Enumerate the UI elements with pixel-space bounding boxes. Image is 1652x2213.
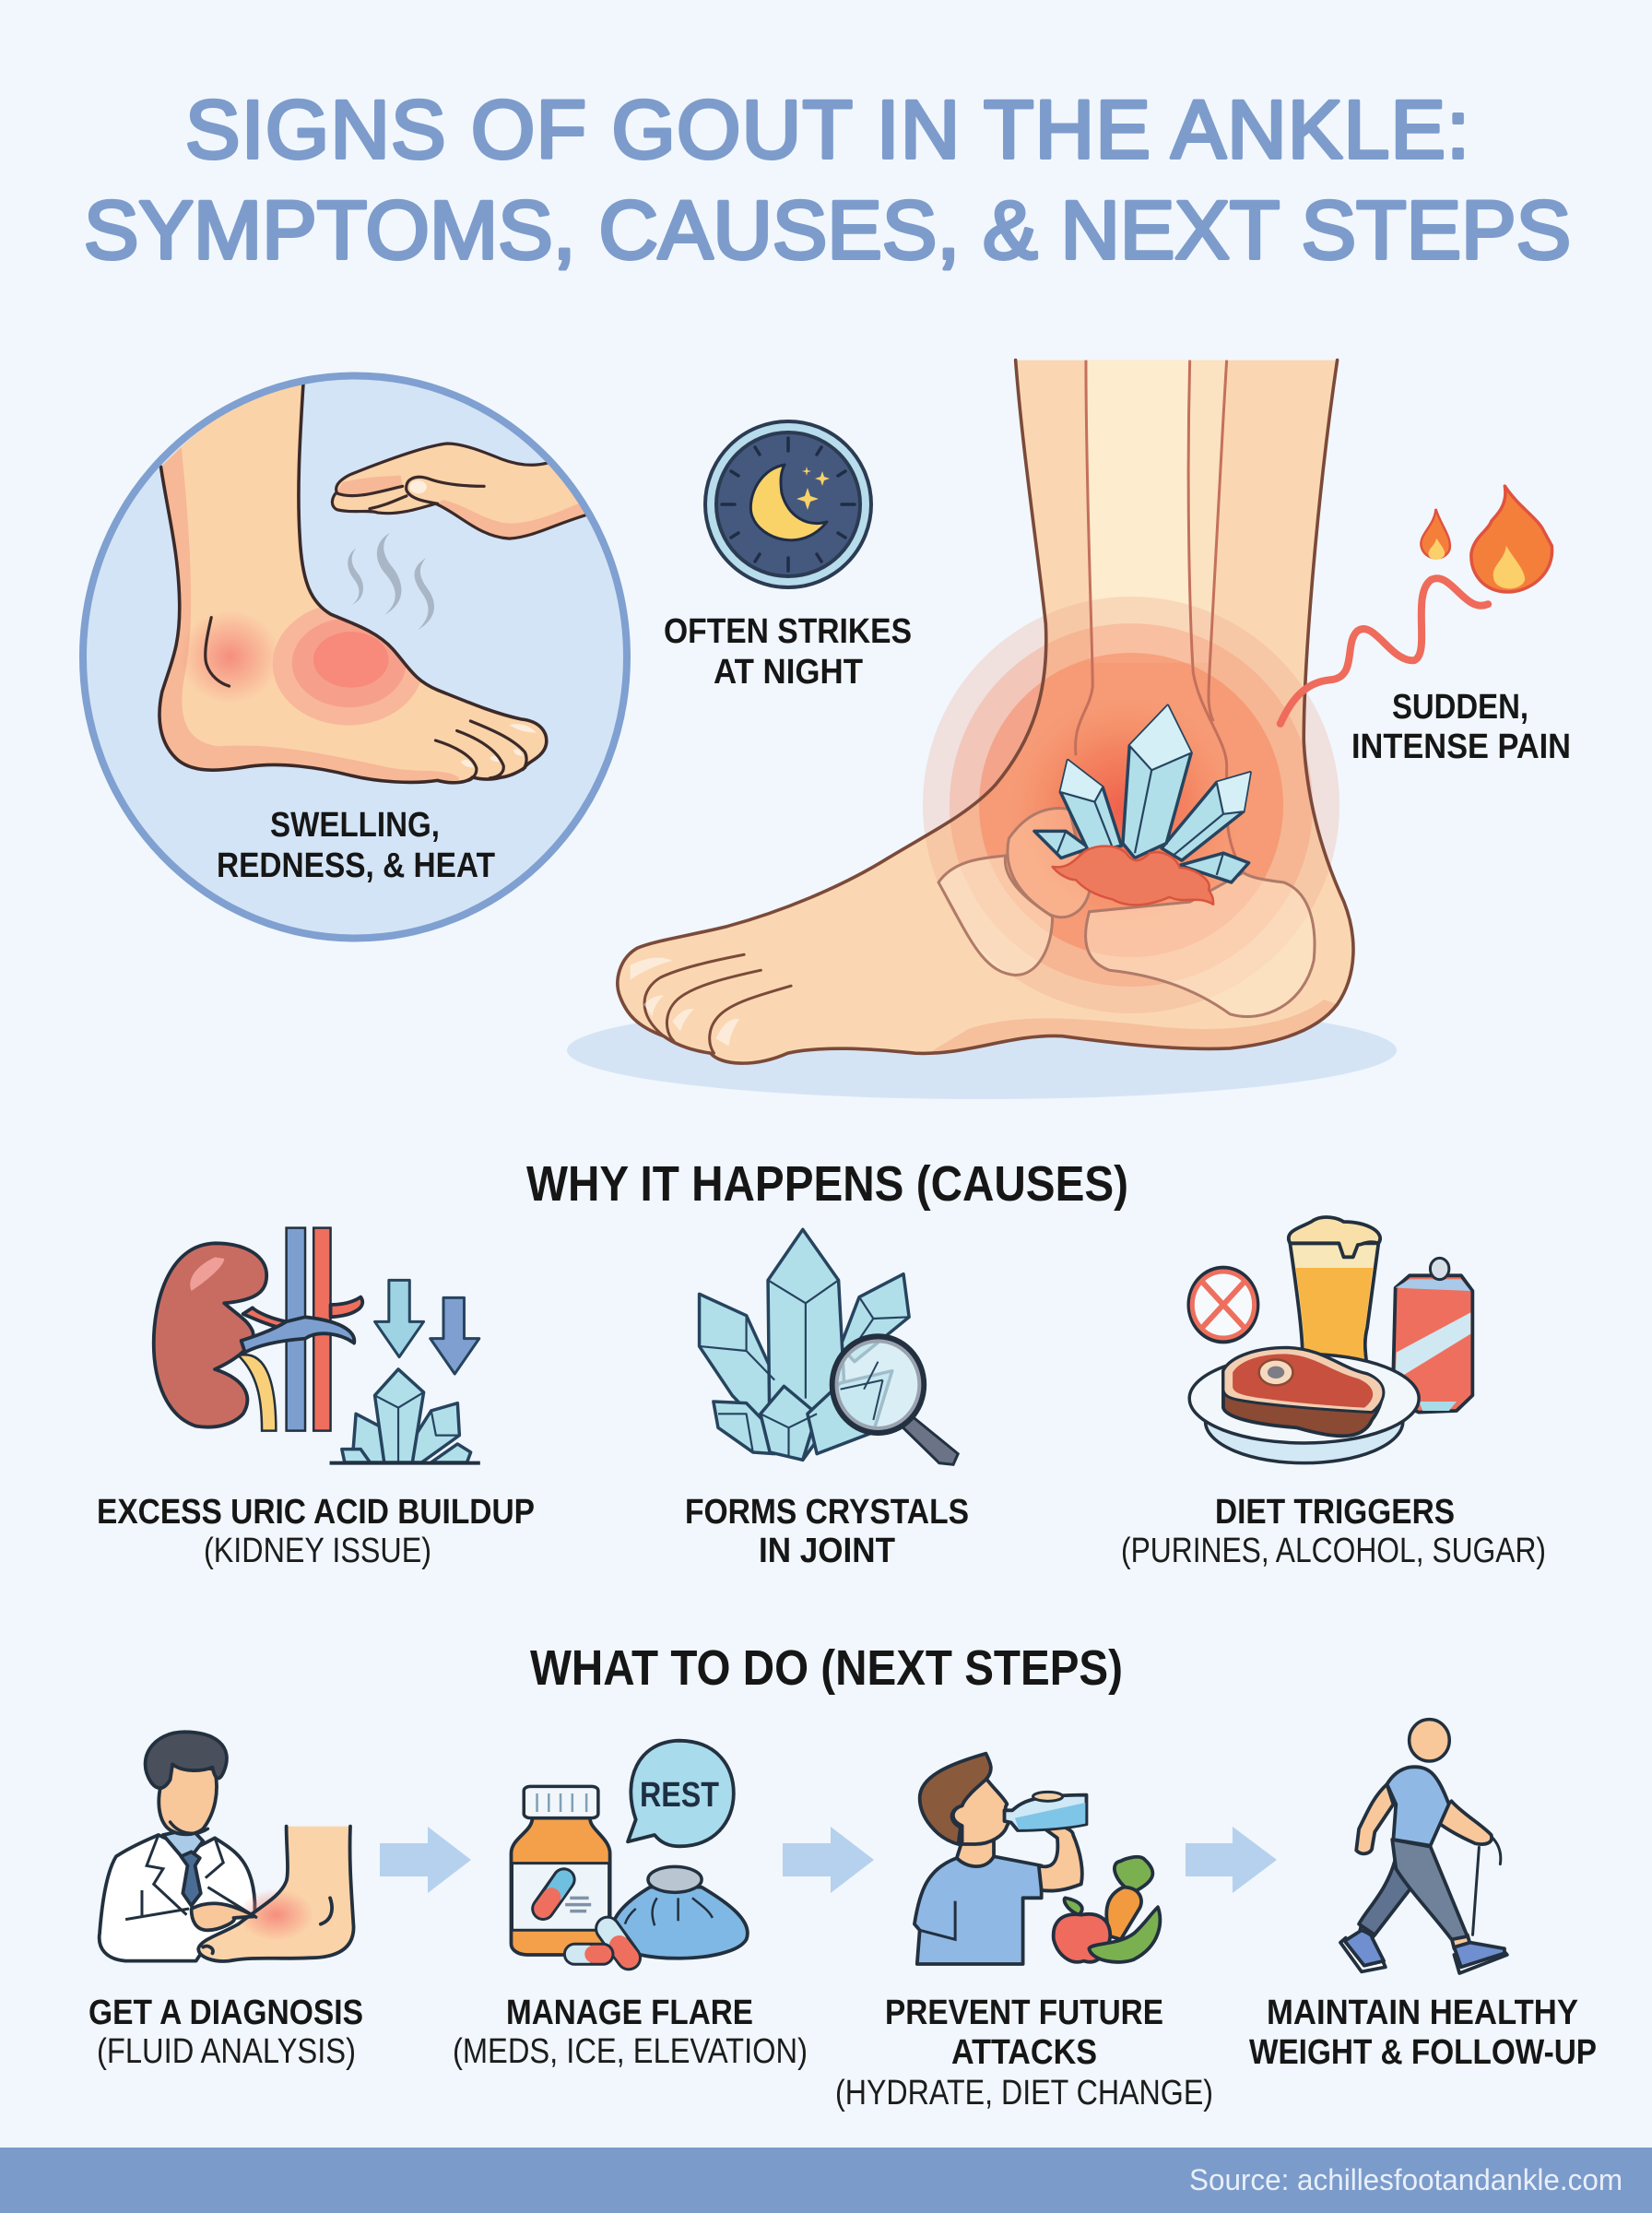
text: manage flare: MANAGE FLARE xyxy=(506,1994,753,2032)
icon: pill bottle xyxy=(511,1786,610,1955)
icon: night clock with moon xyxy=(705,421,871,587)
icon: ice bag xyxy=(612,1866,748,1959)
text: diet triggers: DIET TRIGGERS xyxy=(1215,1493,1455,1532)
text: prevent future attacks xyxy=(835,1994,1213,2112)
text: maintain healthy weight: WEIGHT & FOLLOW-UP xyxy=(1249,2033,1597,2072)
text: prevent future attacks: (HYDRATE, DIET CHANGE) xyxy=(835,2074,1213,2112)
inflammation rings xyxy=(923,597,1339,1013)
icon: beer glass xyxy=(1289,1217,1380,1374)
icon: produce xyxy=(1054,1857,1160,1962)
footer bar with source: Source: achillesfootandankle.com xyxy=(1189,2163,1622,2196)
icon: person walking with cane xyxy=(1340,1720,1507,1973)
text: manage flare: (MEDS, ICE, ELEVATION) xyxy=(453,2032,808,2071)
icon: downward arrows xyxy=(375,1280,479,1374)
icon: diet triggers xyxy=(1189,1217,1472,1463)
floor shadow xyxy=(567,1001,1397,1099)
icon: speech bubble xyxy=(628,1741,734,1846)
heading: causes: WHY IT HAPPENS (CAUSES) xyxy=(526,1156,1128,1212)
text: forms crystals: IN JOINT xyxy=(759,1532,895,1570)
arrow: step 2 to 3 xyxy=(783,1827,874,1893)
foot and leg xyxy=(618,361,1353,1063)
illustration: ankle with gout crystals xyxy=(567,361,1397,1099)
icon: swollen foot xyxy=(152,377,547,789)
title: SIGNS OF GOUT IN THE ANKLE: xyxy=(185,83,1469,175)
text: sudden intense pain: SUDDEN, xyxy=(1392,688,1528,727)
text: often strikes at night: OFTEN STRIKES xyxy=(664,612,912,651)
urate crystals xyxy=(1034,705,1250,905)
text: sudden intense pain xyxy=(1351,688,1571,766)
icon: medication, ice and rest xyxy=(511,1741,748,1959)
icon: soda can xyxy=(1393,1258,1472,1413)
title xyxy=(84,83,1571,276)
text: swelling label: SWELLING, xyxy=(270,806,440,845)
bones and outline xyxy=(618,361,1353,1063)
icon: loose capsules xyxy=(574,1929,629,1958)
icon: hand sensing heat xyxy=(332,444,598,538)
title: SYMPTOMS, CAUSES, & NEXT STEPS xyxy=(84,183,1571,276)
text: often strikes at night xyxy=(664,612,912,692)
icon: heat waves xyxy=(348,533,434,630)
arrow: step 1 to 2 xyxy=(380,1827,471,1893)
text: maintain healthy weight: MAINTAIN HEALTHY xyxy=(1267,1994,1578,2032)
text: swelling label: REDNESS, & HEAT xyxy=(217,846,495,885)
text: uric acid xyxy=(97,1493,535,1570)
circle border xyxy=(83,376,627,939)
text: prevent future attacks: ATTACKS xyxy=(951,2033,1097,2072)
footer bar with source xyxy=(0,2148,1652,2213)
icon: prohibited sign xyxy=(1190,1269,1257,1341)
panel: excess uric acid buildup xyxy=(154,1228,480,1463)
text: prevent future attacks: PREVENT FUTURE xyxy=(885,1994,1163,2032)
icon: plate with steak xyxy=(1189,1348,1419,1463)
icon: pain squiggle and flames xyxy=(1280,486,1552,724)
text: often strikes at night: AT NIGHT xyxy=(714,653,863,692)
text: diet triggers: (PURINES, ALCOHOL, SUGAR) xyxy=(1121,1532,1546,1570)
text: forms crystals: FORMS CRYSTALS xyxy=(685,1493,969,1532)
icon: doctor examining foot xyxy=(100,1732,354,1961)
arrow: step 3 to 4 xyxy=(1186,1827,1277,1893)
icon: person drinking water with produce xyxy=(914,1754,1160,1964)
icon: kidney and vessels xyxy=(154,1228,362,1431)
text: uric acid: EXCESS URIC ACID BUILDUP xyxy=(97,1493,535,1532)
heading: next steps: WHAT TO DO (NEXT STEPS) xyxy=(530,1640,1123,1696)
text: rest: REST xyxy=(640,1776,719,1815)
text: swelling label xyxy=(217,806,495,885)
text: sudden intense pain: INTENSE PAIN xyxy=(1351,728,1571,766)
inflamed tissue xyxy=(1053,846,1213,905)
text: manage flare xyxy=(453,1994,808,2071)
text: get a diagnosis xyxy=(88,1994,363,2071)
text: get a diagnosis: (FLUID ANALYSIS) xyxy=(97,2032,356,2071)
panel: swelling, redness and heat xyxy=(83,376,627,939)
text: diet triggers xyxy=(1121,1493,1546,1570)
text: get a diagnosis: GET A DIAGNOSIS xyxy=(88,1994,363,2032)
text: forms crystals xyxy=(685,1493,969,1570)
icon: crystals and magnifier xyxy=(700,1229,958,1464)
text: uric acid: (KIDNEY ISSUE) xyxy=(204,1532,431,1570)
icon: crystals forming xyxy=(330,1369,480,1463)
text: maintain healthy weight xyxy=(1249,1994,1597,2072)
